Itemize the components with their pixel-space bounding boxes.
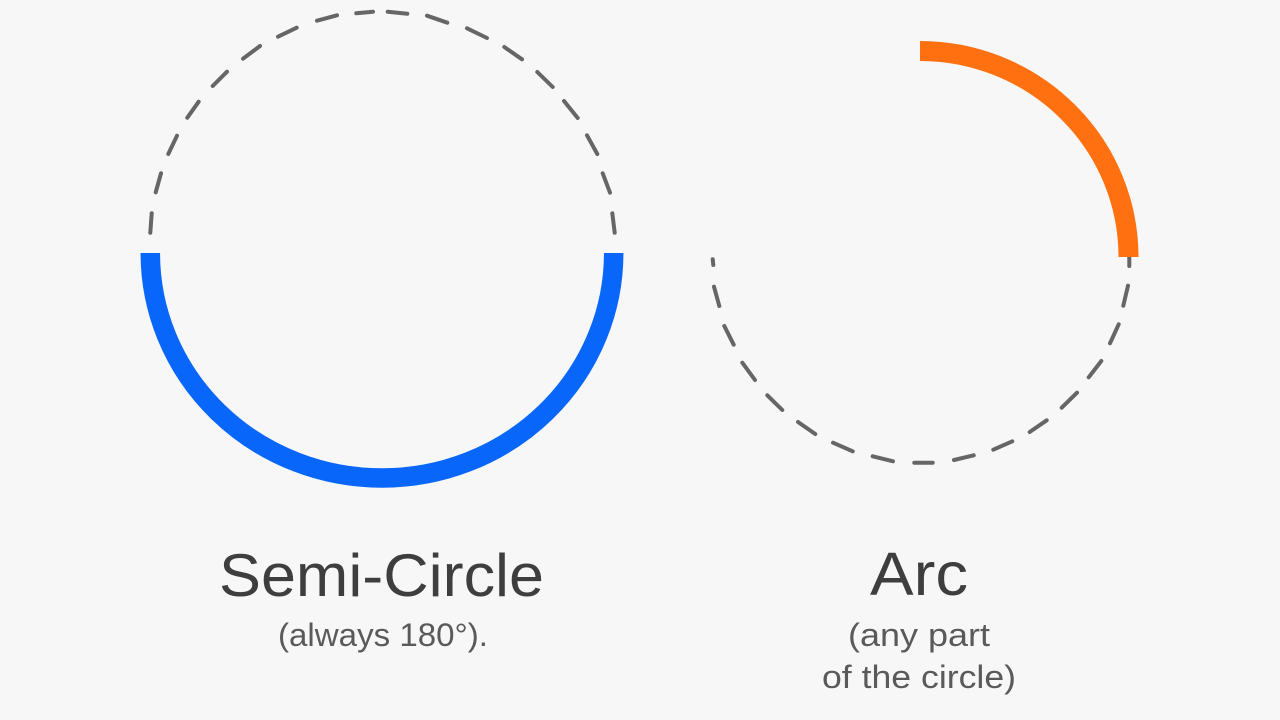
caption: always 180 degrees: (always 180°). — [278, 617, 488, 653]
heading: Semi-Circle: Semi-Circle — [219, 542, 544, 609]
caption line: any part: (any part — [848, 617, 990, 653]
panel: semi-circle — [150, 12, 615, 653]
blue semi-circle stroke — [150, 253, 614, 478]
orange arc stroke — [920, 51, 1128, 257]
heading: Arc: Arc — [870, 540, 968, 608]
caption line: of the circle: of the circle) — [822, 659, 1016, 695]
panel: arc — [713, 51, 1129, 695]
dashed upper half of circle — [150, 12, 615, 233]
dashed remaining part of circle — [713, 256, 1129, 463]
